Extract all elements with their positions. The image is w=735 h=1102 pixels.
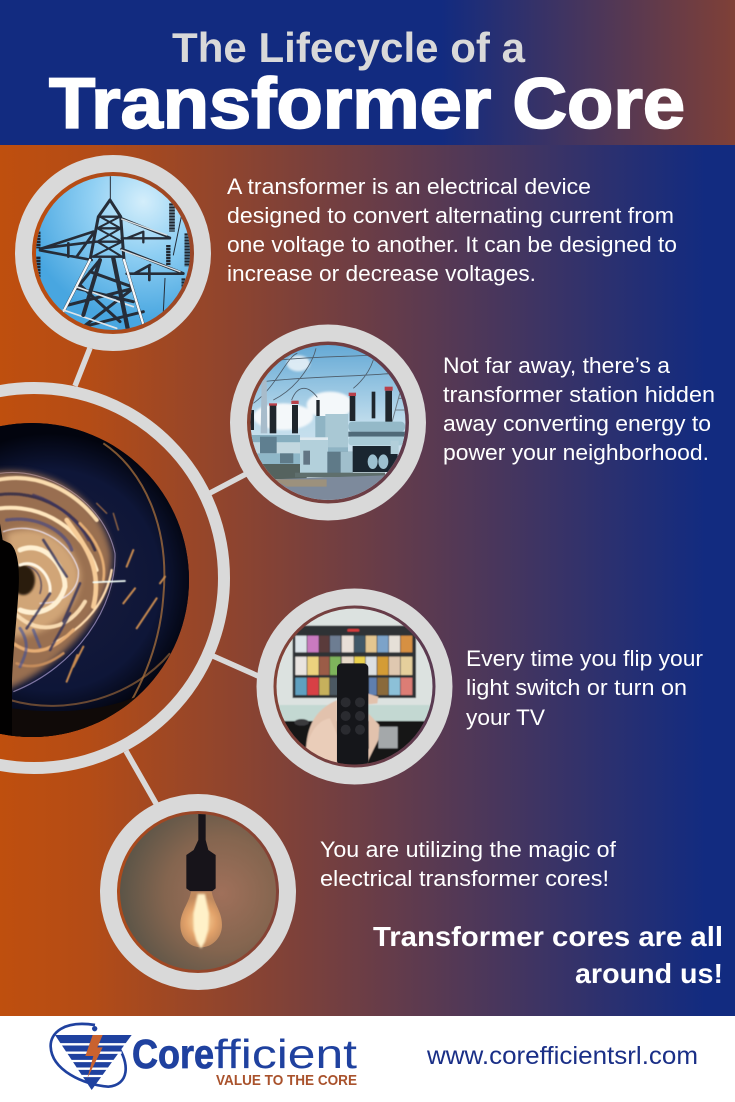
text block 4 <box>320 837 617 891</box>
text block 2: power your neighborhood. <box>443 440 709 465</box>
circle 3: TV and remote photo <box>265 597 444 776</box>
logo wordmark <box>132 1031 358 1077</box>
text block 1: A transformer is an electrical device <box>227 174 591 199</box>
text block 1: one voltage to another. It can be designed to <box>227 232 677 257</box>
connector lines <box>75 348 258 807</box>
title line 1: The Lifecycle of a <box>172 24 526 71</box>
central hub circle: fire swirl photo <box>0 388 224 768</box>
footer band <box>0 1016 735 1102</box>
circle 1: transmission tower photo <box>24 164 202 342</box>
logo wordmark: Core <box>132 1031 214 1077</box>
closing statement: Transformer cores are all <box>373 921 723 952</box>
text block 4: electrical transformer cores! <box>320 866 609 891</box>
text block 1 <box>227 174 677 286</box>
text block 3: your TV <box>466 705 545 730</box>
text block 1: increase or decrease voltages. <box>227 261 536 286</box>
text block 3: light switch or turn on <box>466 675 687 700</box>
text block 2: Not far away, there’s a <box>443 353 671 378</box>
text block 4: You are utilizing the magic of <box>320 837 617 862</box>
text block 1: designed to convert alternating current from <box>227 203 674 228</box>
soft swirl body <box>0 471 112 688</box>
header banner <box>0 0 735 145</box>
logo tagline: VALUE TO THE CORE <box>216 1072 357 1089</box>
title line 2: Transformer Core <box>49 65 685 144</box>
circle 4: light bulb photo <box>108 802 288 982</box>
text block 3: Every time you flip your <box>466 646 703 671</box>
closing statement: around us! <box>575 958 723 989</box>
website url: www.corefficientsrl.com <box>426 1042 698 1070</box>
icon: logo emblem <box>51 1024 132 1090</box>
text block 2: away converting energy to <box>443 411 711 436</box>
circle 2: substation photo <box>238 333 418 512</box>
logo wordmark: fficient <box>214 1031 358 1077</box>
text block 3 <box>466 646 703 730</box>
logo <box>51 1024 358 1090</box>
orange to blue main background <box>0 145 735 1016</box>
text block 2: transformer station hidden <box>443 382 715 407</box>
text block 2 <box>443 353 715 465</box>
closing statement <box>373 921 723 989</box>
